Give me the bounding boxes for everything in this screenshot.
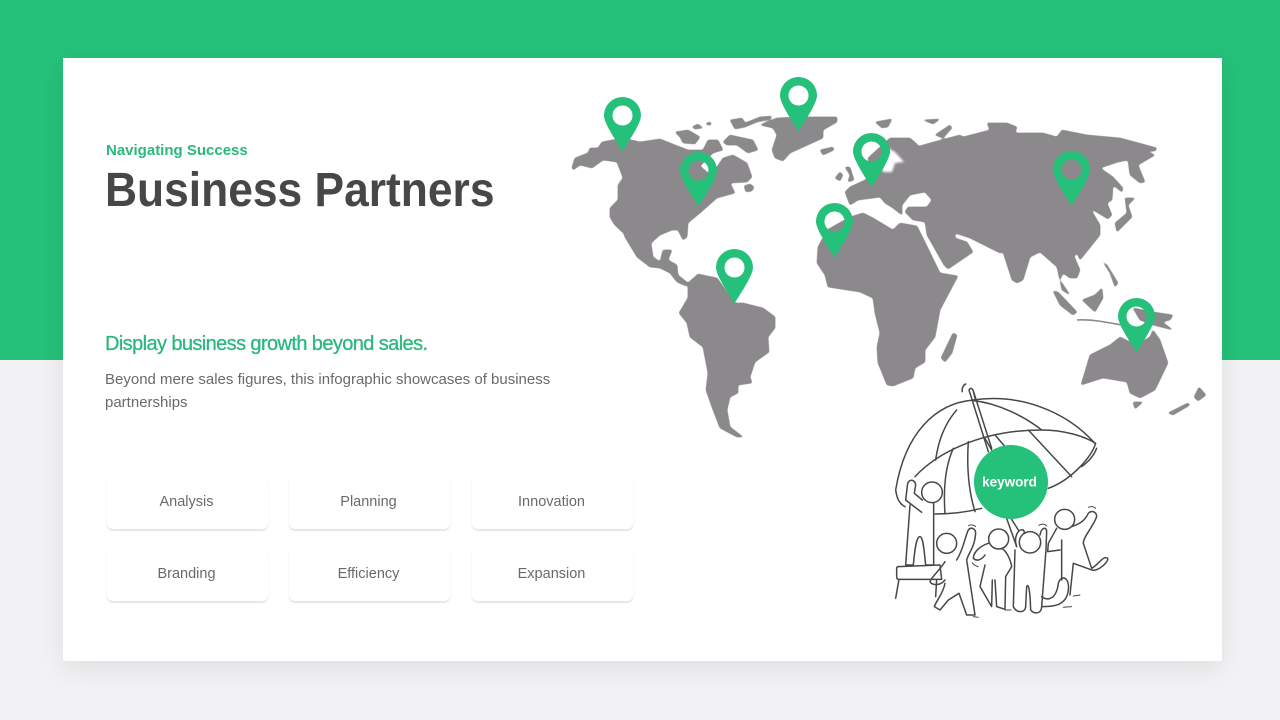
chip: Analysis (107, 476, 268, 529)
body text: Beyond mere sales figures, this infographic showcases of business (105, 371, 550, 388)
keyword circle: keyword (982, 474, 1037, 490)
chip: Innovation: Innovation (518, 494, 585, 510)
pin: Northern Europe (853, 133, 890, 188)
pin: East Asia (1053, 151, 1090, 206)
illustration: people under umbrella (896, 384, 1108, 617)
person on box (896, 480, 942, 598)
green header band (0, 0, 1280, 360)
chip: Expansion (472, 548, 633, 601)
chip: Planning (289, 476, 450, 529)
eyebrow text: Navigating Success (106, 142, 248, 159)
subheading: Display business growth beyond sales. (105, 333, 427, 355)
chip: Branding (107, 548, 268, 601)
pin: South America (716, 249, 753, 304)
Africa (817, 213, 958, 386)
Java line (1077, 320, 1122, 325)
chip: Innovation (472, 476, 633, 529)
keyword circle (974, 445, 1048, 519)
motion marks (968, 507, 1096, 617)
pin: Eastern North America (680, 152, 717, 206)
pin: West Africa (816, 203, 853, 258)
person two (930, 528, 976, 615)
Madagascar (941, 333, 957, 362)
chip: Expansion: Expansion (518, 566, 585, 582)
chip: Branding: Branding (157, 566, 216, 582)
Greenland (760, 117, 837, 161)
Eurasia (845, 123, 1157, 295)
South America (679, 274, 775, 437)
umbrella (896, 384, 1097, 547)
Arctic islands (675, 116, 772, 153)
pin: Australia (1118, 298, 1155, 352)
Newfoundland (744, 184, 754, 192)
Iceland and British Isles (820, 147, 854, 182)
North America (572, 138, 752, 286)
title: Business Partners (105, 164, 494, 217)
body text (105, 371, 550, 411)
keyword chips (106, 483, 634, 604)
Baltic cut-out (880, 148, 904, 172)
person five (1042, 509, 1108, 607)
chip: Analysis: Analysis (160, 494, 214, 510)
chip: Planning: Planning (340, 494, 397, 510)
pin: Greenland (780, 77, 817, 132)
chip: Efficiency (289, 548, 450, 601)
pin: Alaska (604, 97, 641, 152)
body text: partnerships (105, 394, 188, 411)
white main card (63, 58, 1222, 661)
person four (1013, 528, 1047, 613)
person three (973, 529, 1012, 609)
Australia (1081, 330, 1168, 398)
map pins (604, 77, 1155, 352)
Pacific and Indonesian islands (875, 119, 1206, 415)
chip: Efficiency: Efficiency (338, 566, 399, 582)
world map (572, 116, 1206, 437)
